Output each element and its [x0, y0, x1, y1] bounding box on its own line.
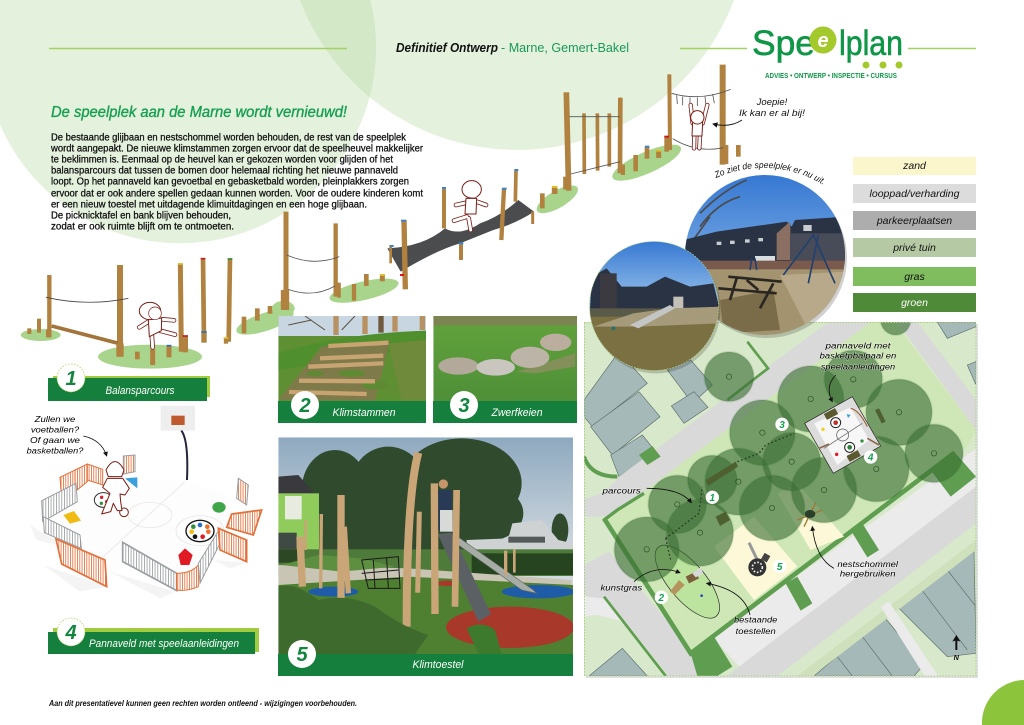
net [362, 557, 400, 588]
green mounds [272, 138, 685, 316]
number badges: 5 [777, 562, 783, 573]
banner: Pannaveld met speelaanleidingen: 4 [64, 622, 77, 644]
green mounds [21, 304, 296, 369]
banner: Klimstammen: 2 [298, 395, 311, 417]
map labels and arrows: speelaanleidingen [821, 361, 895, 371]
photo: Zwerfkeien [433, 316, 577, 401]
person [438, 490, 452, 530]
park lawn [606, 322, 976, 653]
coloured post tops [380, 137, 669, 275]
legend: prive tuin [853, 238, 976, 257]
foreground bushes [278, 586, 428, 654]
photo: Klimtoestel [278, 437, 575, 654]
existing equipment [670, 567, 703, 597]
speech text [27, 414, 107, 456]
climbing panel [438, 533, 491, 622]
map labels and arrows: parcours [601, 485, 642, 495]
wooden posts [29, 258, 270, 365]
banner: Pannaveld met speelaanleidingen [48, 618, 259, 654]
speech text: Zullen we [34, 414, 76, 424]
fences [42, 455, 262, 591]
green verges [639, 446, 976, 676]
banner: Balansparcours [48, 364, 210, 401]
logo: Speelplan: lplan [839, 24, 903, 63]
intro text block: zodat er ook ruimte blijft om te ontmoeten. [51, 222, 234, 232]
number badges: 4 [867, 453, 874, 464]
number badges: 3 [779, 420, 785, 431]
header lines [49, 48, 976, 50]
banner: Klimtoestel [278, 640, 573, 676]
rope bridge [387, 200, 534, 272]
north arrow [952, 635, 960, 662]
legend: groen [853, 293, 976, 312]
legend: groen: groen [901, 297, 928, 309]
map labels and arrows: basketpbalpaal en [820, 351, 897, 361]
intro text block: ervoor dat er ook andere spellen gedaan kunnen worden. Voor de oudere kinderen komt [51, 188, 423, 200]
speech text: basketballen? [27, 445, 84, 455]
intro text block: loopt. Op het pannaveld kan gevoetbal en gebasketbald worden, pleinplakkers zorgen [51, 176, 409, 188]
number badges: 2 [658, 593, 665, 604]
speech text: voetballen? [31, 425, 79, 435]
map labels and arrows: toestellen [736, 626, 776, 636]
title: - Marne, Gemert-Bakel [501, 41, 629, 55]
multi-court plan [805, 397, 881, 473]
legend: zand: zand [902, 160, 927, 172]
site map [584, 305, 978, 678]
banner: Klimstammen: Klimstammen [332, 407, 396, 419]
photo: current playground, large circle [680, 173, 850, 340]
logo: Speelplan [752, 24, 903, 80]
child with ball [102, 462, 129, 517]
north arrow: N [954, 653, 960, 662]
legend: parkeerplaatsen: parkeerplaatsen [876, 215, 952, 227]
ropes and wires [287, 89, 731, 293]
child balancing [139, 302, 175, 347]
court floor [40, 480, 237, 593]
illustration: balance course left part [21, 258, 296, 369]
heading: De speelplek aan de Marne wordt vernieuwd! [51, 104, 348, 121]
speech text: Of gaan we [30, 435, 80, 445]
intro text block: De bestaande glijbaan en nestschommel worden behouden, de rest van de speelplek [51, 132, 407, 144]
climbing frame [748, 543, 770, 576]
climbing posts [300, 453, 514, 627]
callout: Joepie [713, 97, 805, 125]
map labels and arrows: hergebruiken [840, 569, 896, 579]
wooden posts [285, 65, 738, 310]
court floor shadows [30, 525, 247, 598]
map labels and arrows: kunstgras [600, 583, 643, 593]
callout: Joepie: Ik kan er al bij! [739, 108, 805, 119]
intro text block: wordt aangepakt. De nieuwe klimstammen zorgen ervoor dat de speelheuvel makkelijker [50, 144, 424, 154]
map labels and arrows: bestaande [734, 615, 778, 625]
logo: Speelplan: ADVIES • ONTWERP • INSPECTIE • CURSUS [765, 73, 897, 80]
map labels and arrows: pannaveld met [824, 340, 891, 350]
banner: Zwerfkeien [433, 391, 577, 423]
number badges [655, 418, 877, 604]
map labels and arrows [600, 340, 899, 636]
intro text block: De picknicktafel en bank blijven behouden, [51, 210, 231, 222]
tree canopies [614, 305, 963, 582]
intro text block: balansparcours dat tussen de bomen door helemaal richting het nieuwe pannaveld [51, 166, 398, 176]
floor markings [63, 477, 226, 565]
artificial grass [654, 544, 720, 618]
photo: current playground, small circle [587, 240, 723, 374]
logo: Speelplan: e [817, 30, 829, 52]
child hanging [691, 105, 707, 148]
legend: looppad/verharding: looppad/verharding [870, 188, 960, 200]
map labels and arrows: nestschommel [837, 559, 899, 569]
legend: looppad/verharding [853, 184, 976, 203]
intro text block: te beklimmen is. Eenmaal op de heuvel kan er gekozen worden voor glijden of het [51, 154, 393, 166]
benches [706, 408, 886, 526]
banner: Zwerfkeien: Zwerfkeien [491, 407, 542, 419]
banner: Pannaveld met speelaanleidingen: Pannaveld met speelaanleidingen [89, 638, 239, 650]
banner: Balansparcours: Balansparcours [106, 385, 175, 397]
child running [454, 181, 486, 230]
intro text block [50, 132, 424, 232]
balance course trail [666, 433, 794, 560]
rope [46, 297, 128, 302]
legend: prive tuin: privé tuin [892, 242, 936, 254]
banner: Klimtoestel: 5 [296, 644, 308, 666]
footer disclaimer: Aan dit presentatievel kunnen geen rechten worden ontleend - wijzigingen voorbehouden. [48, 699, 357, 708]
banner: Zwerfkeien: 3 [458, 395, 470, 417]
caption: Zo ziet de speelplek er nu uit: Zo ziet de speelplek er nu uit. [714, 162, 824, 184]
legend [853, 157, 976, 312]
banner: Klimtoestel: Klimtoestel [412, 659, 464, 671]
trees [302, 438, 568, 553]
swing [797, 503, 822, 527]
sand areas [714, 483, 844, 600]
logo: Speelplan: Spe [752, 24, 815, 63]
callout: Joepie: Joepie! [756, 97, 788, 108]
illustration: multi-court [27, 406, 262, 598]
trunks [644, 374, 937, 552]
pavement [712, 448, 976, 667]
legend: zand [853, 157, 976, 175]
illustration: climbing route with rope bridge [272, 65, 738, 316]
buildings [584, 322, 976, 676]
roads [584, 322, 976, 676]
legend: gras: gras [904, 271, 925, 283]
coloured post tops [167, 259, 232, 346]
slide [458, 537, 537, 593]
photo: Klimstammen [278, 316, 426, 401]
banner: Balansparcours: 1 [65, 368, 77, 390]
legend: gras [853, 267, 976, 286]
number badges: 1 [710, 493, 716, 504]
basketball hoop [161, 406, 195, 480]
legend: parkeerplaatsen [853, 211, 976, 230]
photos group [278, 316, 577, 654]
banner: Klimstammen [278, 391, 426, 423]
intro text block: er een nieuw toestel met uitdagende klimuitdagingen en een hoge glijbaan. [51, 200, 367, 210]
title: Definitief Ontwerp [396, 41, 498, 55]
